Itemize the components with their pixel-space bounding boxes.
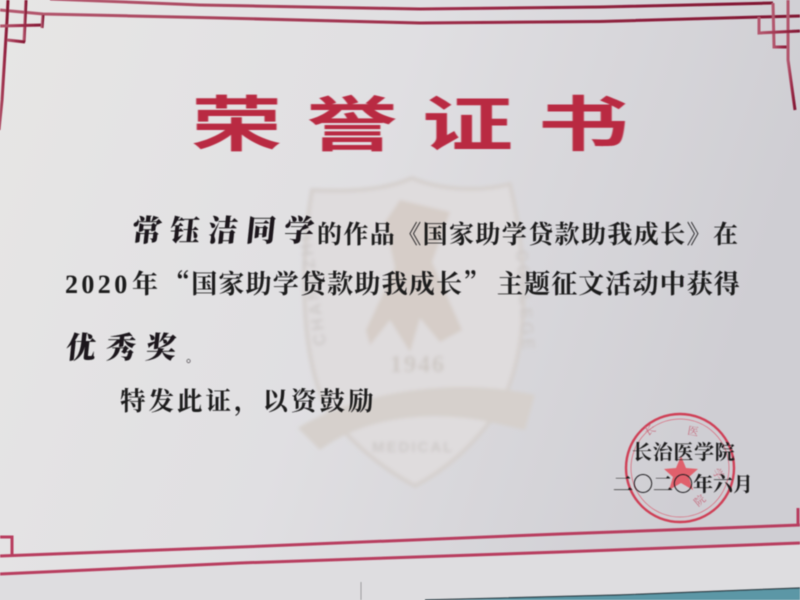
watermark: college crest: 1946 [390, 352, 446, 378]
body text [64, 214, 741, 417]
watermark: college crest: CHANGZHI [295, 232, 330, 347]
full stop after award: 。 [186, 347, 200, 367]
issuer and date [613, 441, 753, 496]
red seal: 学 [709, 466, 726, 482]
decorative frame: top edge and corners [0, 0, 800, 130]
watermark: college crest [295, 178, 538, 486]
second line: 2020 [65, 270, 131, 299]
decorative frame: bottom edge and corners [0, 508, 800, 574]
red seal: 长 [642, 422, 658, 439]
second line: 年 [132, 269, 158, 299]
recipient name: 常钰洁同学 [130, 214, 324, 248]
award name: 优秀奖 [64, 331, 188, 365]
bottom paper margin [0, 544, 800, 600]
red seal: 医 [686, 424, 700, 439]
second line: 主题征文活动中获得 [497, 269, 741, 299]
red seal [626, 414, 734, 522]
issuer name: 长治医学院 [632, 441, 736, 464]
title: 荣誉证书 [191, 77, 653, 164]
closing line: 特发此证，以资鼓励 [120, 387, 377, 417]
first line: 的作品《国家助学贷款助我成长》在 [317, 215, 738, 251]
issue date: 二〇二〇年六月 [613, 472, 753, 496]
second line: “国家助学贷款助我成长” [164, 264, 490, 301]
table edge below the paper [361, 582, 800, 600]
watermark: college crest: MEDICAL [372, 439, 454, 456]
red seal: 院 [691, 492, 708, 509]
seal star [664, 456, 698, 490]
watermark: college crest: COLLEGE [512, 249, 538, 353]
